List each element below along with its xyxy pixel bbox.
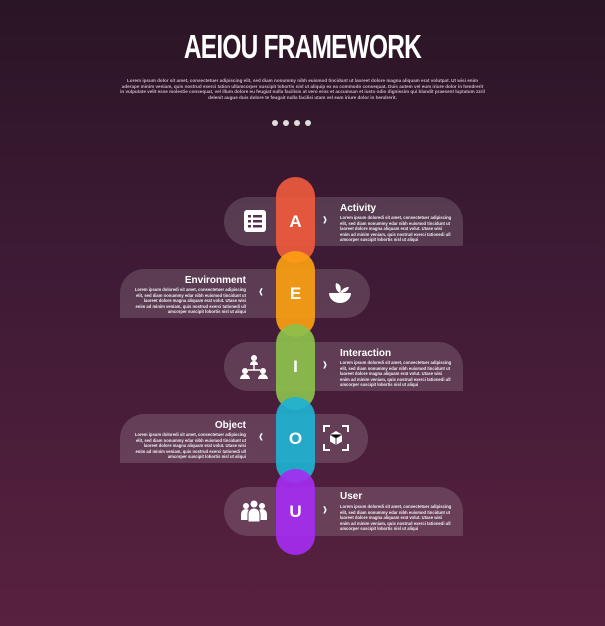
text: object: enim ad minim veniam, quis nostrud exerci tationedi ull: [135, 448, 246, 454]
arrow: activity: ›: [323, 209, 327, 229]
text: object: laoreet dolore magna aliquam erat volut. Utase wisi: [144, 443, 246, 448]
letter U: U: [289, 502, 302, 521]
heading: environment: Environment: [185, 275, 246, 286]
text: activity: amcorper suscipit lobortis nisl ut aliqui: [340, 237, 418, 242]
pill: E: [276, 251, 315, 337]
text: user: amcorper suscipit lobortis nisl ut aliqui: [340, 526, 418, 531]
text: environment: [135, 287, 246, 314]
subtitle text: Lorem ipsum dolor sit amet, consectetuer adipiscing elit, sed diam nonummy nibh euismod tincidunt ut laoreet dolore magna aliquam erat volutpat. Ut wisi enim aderape minim veniam, quis nostrud exerci tation ullamcorper suscipit lobortis nisl ut aliquip ex ea commodo consequat. Duis autem vel eum iriure dolor in hendrerit in vulputate velit esse molestie consequat, vel illum dolore eu feugiat nulla facilisis at vero eros et accumsan et iusto odio dignissim qui blandit praesent luptatum zzril delenit augue duis dolore te feugait nulla facilisi utam vel eam iriure dolor in hendrerit.: [120, 78, 485, 100]
text: user: enim ad minim veniam, quis nostrud exerci tationedi ull: [340, 520, 451, 526]
text: activity: [340, 215, 451, 242]
text: interaction: enim ad minim veniam, quis nostrud exerci tationedi ull: [340, 376, 451, 382]
heading: interaction: Interaction: [340, 348, 391, 359]
text: environment: elit, sed diam nonummy edar nibh euismod tincidunt ut: [136, 292, 246, 298]
letter I: I: [293, 357, 298, 376]
text: activity: laoreet dolore magna aliquam erat volut. Utase wisi: [340, 226, 442, 231]
panel: environment: [120, 269, 370, 318]
pill: A: [276, 177, 315, 263]
text: interaction: [340, 360, 451, 387]
text: activity: elit, sed diam nonummy edar nibh euismod tincidunt ut: [340, 220, 450, 226]
heading: activity: Activity: [340, 203, 376, 214]
icon: network people: [240, 355, 268, 379]
text: user: laoreet dolore magna aliquam erat volut. Utase wisi: [340, 515, 442, 520]
text: environment: amcorper suscipit lobortis nisl ut aliqui: [168, 309, 246, 314]
pill: I: [276, 324, 315, 410]
panel: object: [120, 414, 368, 463]
letter A: A: [289, 212, 302, 231]
text: interaction: elit, sed diam nonummy edar nibh euismod tincidunt ut: [340, 366, 450, 370]
text: activity: Lorem ipsum doloredi sit amet, consectetuer adipiscing: [340, 215, 451, 220]
dots: [272, 120, 311, 126]
icon: plant bowl: [329, 283, 351, 303]
text: environment: enim ad minim veniam, quis nostrud exerci tationedi ull: [135, 304, 246, 308]
text: user: [340, 504, 451, 531]
arrow: user: ›: [323, 499, 327, 519]
text: interaction: laoreet dolore magna aliquam erat volut. Utase wisi: [340, 371, 442, 376]
text: user: Lorem ipsum doloredi sit amet, consectetuer adipiscing: [340, 504, 451, 509]
panel: activity: [224, 197, 463, 246]
arrow: object: ‹: [259, 426, 263, 446]
icon: list: [244, 210, 266, 232]
letter E: E: [290, 284, 301, 303]
arrow: environment: ‹: [259, 281, 263, 301]
text: environment: laoreet dolore magna aliquam erat volut. Utase wisi: [144, 298, 246, 303]
text: object: Lorem ipsum doloredi sit amet, consectetuer adipiscing: [135, 432, 246, 437]
text: interaction: amcorper suscipit lobortis nisl ut aliqui: [340, 382, 418, 387]
icon: users: [241, 500, 267, 522]
title: AEIOU FRAMEWORK: [184, 28, 421, 65]
text: interaction: Lorem ipsum doloredi sit amet, consectetuer adipiscing: [340, 360, 451, 365]
pill: O: [276, 397, 315, 483]
arrow: interaction: ›: [323, 354, 327, 374]
heading: user: User: [340, 491, 362, 502]
panel: user: [224, 487, 463, 536]
text: object: elit, sed diam nonummy edar nibh euismod tincidunt ut: [136, 438, 246, 442]
heading: object: Object: [215, 420, 246, 431]
text: object: [135, 432, 246, 459]
panel: interaction: [224, 342, 463, 391]
icon: cube scan: [323, 425, 349, 451]
text: environment: Lorem ipsum doloredi sit amet, consectetuer adipiscing: [135, 287, 246, 292]
text: user: elit, sed diam nonummy edar nibh euismod tincidunt ut: [340, 510, 450, 514]
pill: U: [276, 469, 315, 555]
letter O: O: [289, 429, 302, 448]
text: activity: enim ad minim veniam, quis nostrud exerci tationedi ull: [340, 232, 451, 236]
text: object: amcorper suscipit lobortis nisl ut aliqui: [168, 454, 246, 459]
